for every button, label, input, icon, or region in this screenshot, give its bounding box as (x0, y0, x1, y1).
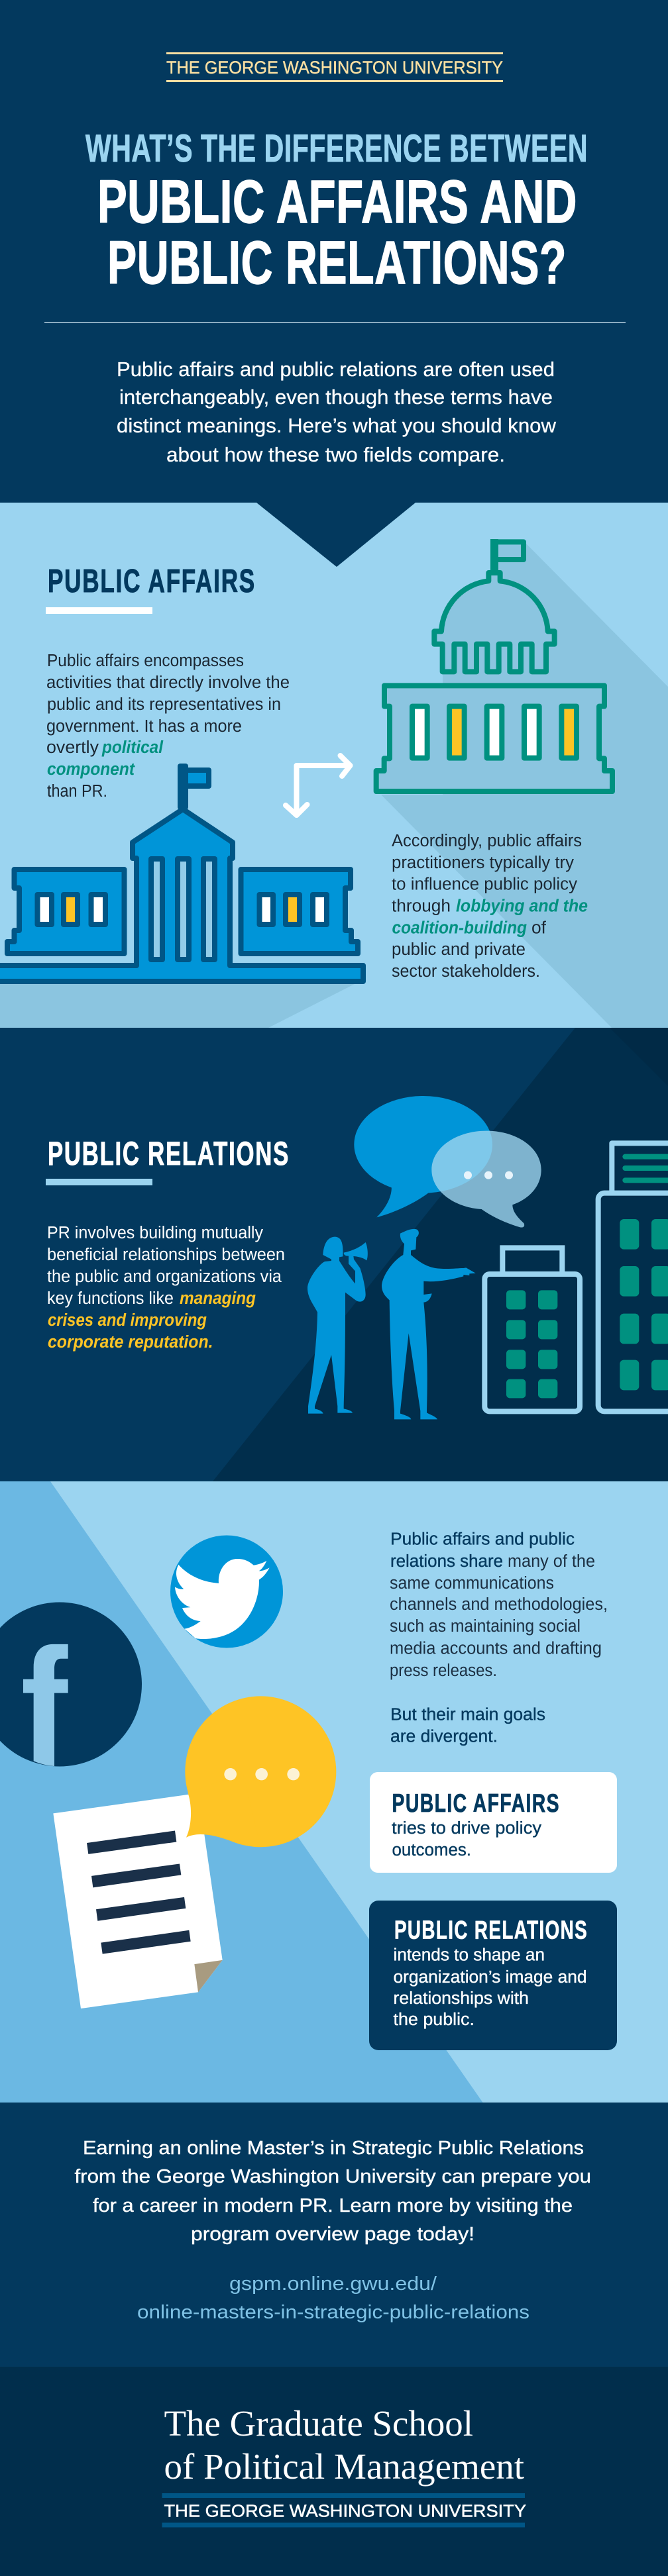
logo: The George Washington University (166, 52, 503, 82)
text: shared methods: press releases. (390, 1661, 497, 1680)
logo: graduate school: The Graduate School (164, 2403, 473, 2444)
icon: dots (464, 1171, 513, 1179)
logo: The George Washington University: THE GEORGE WASHINGTON UNIVERSITY (166, 58, 503, 77)
icon: branching arrows (286, 756, 350, 815)
intro text: interchangeably, even though these terms have (119, 385, 553, 409)
logo: graduate school (162, 2403, 526, 2527)
icon: blue speech bubble (354, 1096, 492, 1217)
icon: small building (484, 1248, 580, 1411)
text: link (137, 2273, 529, 2323)
intro text: Public affairs and public relations are often used (117, 358, 555, 381)
text: practitioners: public and private (392, 940, 526, 959)
intro text (117, 358, 557, 466)
text: PR definition: crises and improving (48, 1311, 207, 1330)
icon: facebook (0, 1603, 142, 1767)
intro text: about how these two fields compare. (166, 443, 505, 466)
text: PR definition: corporate reputation. (48, 1333, 213, 1352)
panel: shared channels (0, 1481, 668, 2103)
text: CTA: Earning an online Master’s in Strategic Public Relations (83, 2138, 584, 2159)
icon: blue government building (0, 766, 363, 981)
text: shared methods (390, 1530, 608, 1746)
text: definition: public and its representatives in (47, 695, 281, 714)
heading: public affairs: PUBLIC AFFAIRS (48, 563, 256, 599)
text: PR definition: PR involves building mutually (47, 1224, 263, 1242)
icon: tall building (598, 1143, 668, 1411)
text: shared methods: are divergent. (390, 1727, 498, 1746)
icon: document and yellow speech bubble (53, 1696, 336, 2008)
text: practitioners: lobbying and the (456, 897, 588, 915)
panel: public affairs (0, 503, 668, 1028)
panel: call to action (0, 2103, 668, 2367)
icon: yellow speech bubble (185, 1696, 336, 1847)
text: PR definition: the public and organizations via (47, 1267, 282, 1286)
text: practitioners: through (392, 897, 451, 915)
panel: header (0, 0, 668, 503)
text: definition: Public affairs encompasses (47, 652, 244, 670)
icon: teal capitol (376, 539, 612, 791)
text: shared methods: many of the (508, 1552, 595, 1571)
illustration: buildings (484, 1143, 668, 1411)
text: definition: overtly (46, 738, 99, 757)
notch triangle (256, 503, 416, 567)
text: definition (46, 652, 290, 801)
text: PR definition (47, 1224, 285, 1352)
text: CTA: from the George Washington University can prepare you (74, 2166, 591, 2187)
callout: public affairs: tries to drive policy (392, 1819, 541, 1838)
capitol long shadow (381, 543, 668, 1028)
figure: woman with megaphone (307, 1237, 368, 1414)
callout: public affairs (370, 1772, 617, 1873)
text: practitioners (392, 832, 588, 981)
text: shared methods: same communications (390, 1574, 554, 1593)
text: shared methods: such as maintaining social (390, 1617, 581, 1636)
text: PR definition: managing (180, 1289, 256, 1308)
heading: public relations: PUBLIC RELATIONS (48, 1135, 290, 1172)
text: CTA: for a career in modern PR. Learn more by visiting the (93, 2195, 573, 2216)
callout: public relations: relationships with (394, 1989, 529, 2008)
icon: document (53, 1793, 223, 2008)
callout: public relations: the public. (394, 2010, 474, 2029)
left building shadow (0, 984, 355, 1028)
callout: public relations: PUBLIC RELATIONS (394, 1916, 588, 1944)
callout: public relations: organization’s image and (394, 1968, 587, 1987)
text: shared methods: media accounts and drafting (390, 1640, 602, 1658)
text: link: gspm.online.gwu.edu/ (229, 2273, 437, 2295)
text: practitioners: coalition-building (392, 919, 527, 938)
text: shared methods: Public affairs and public (390, 1530, 575, 1548)
text: link: online-masters-in-strategic-public-relations (137, 2302, 529, 2323)
text: practitioners: practitioners typically try (392, 854, 574, 872)
intro text: distinct meanings. Here’s what you should know (117, 414, 557, 437)
text: practitioners: sector stakeholders. (392, 962, 540, 981)
text: shared methods: relations share (390, 1552, 503, 1571)
logo: graduate school: THE GEORGE WASHINGTON UNIVERSITY (164, 2501, 526, 2520)
callout: public affairs: PUBLIC AFFAIRS (392, 1789, 560, 1818)
icon: twitter (170, 1535, 283, 1648)
text: definition: political (101, 738, 164, 757)
icon: pale speech bubble (431, 1131, 541, 1228)
figure: man pointing (382, 1229, 476, 1419)
callout: public relations: intends to shape an (394, 1946, 545, 1964)
text: CTA: program overview page today! (191, 2224, 474, 2245)
callout: public affairs: outcomes. (392, 1841, 471, 1859)
text: practitioners: of (531, 919, 547, 938)
text: shared methods: But their main goals (390, 1706, 545, 1724)
text: CTA (74, 2138, 591, 2245)
text: PR definition: beneficial relationships between (47, 1246, 285, 1264)
text: PR definition: key functions like (47, 1289, 174, 1308)
illustration: speech bubbles and people (307, 1096, 541, 1419)
callout: public relations (369, 1901, 617, 2050)
text: definition: activities that directly involve the (46, 673, 290, 692)
text: practitioners: to influence public policy (392, 875, 577, 894)
text: definition: government. It has a more (46, 717, 242, 736)
text: definition: component (47, 760, 135, 779)
panel: public relations (0, 1028, 668, 1481)
panel: footer (0, 2367, 668, 2576)
text: practitioners: Accordingly, public affairs (392, 832, 582, 850)
logo: graduate school: of Political Management (164, 2446, 524, 2487)
title (85, 127, 588, 297)
text: definition: than PR. (47, 782, 107, 801)
text: shared methods: channels and methodologies, (390, 1595, 608, 1614)
